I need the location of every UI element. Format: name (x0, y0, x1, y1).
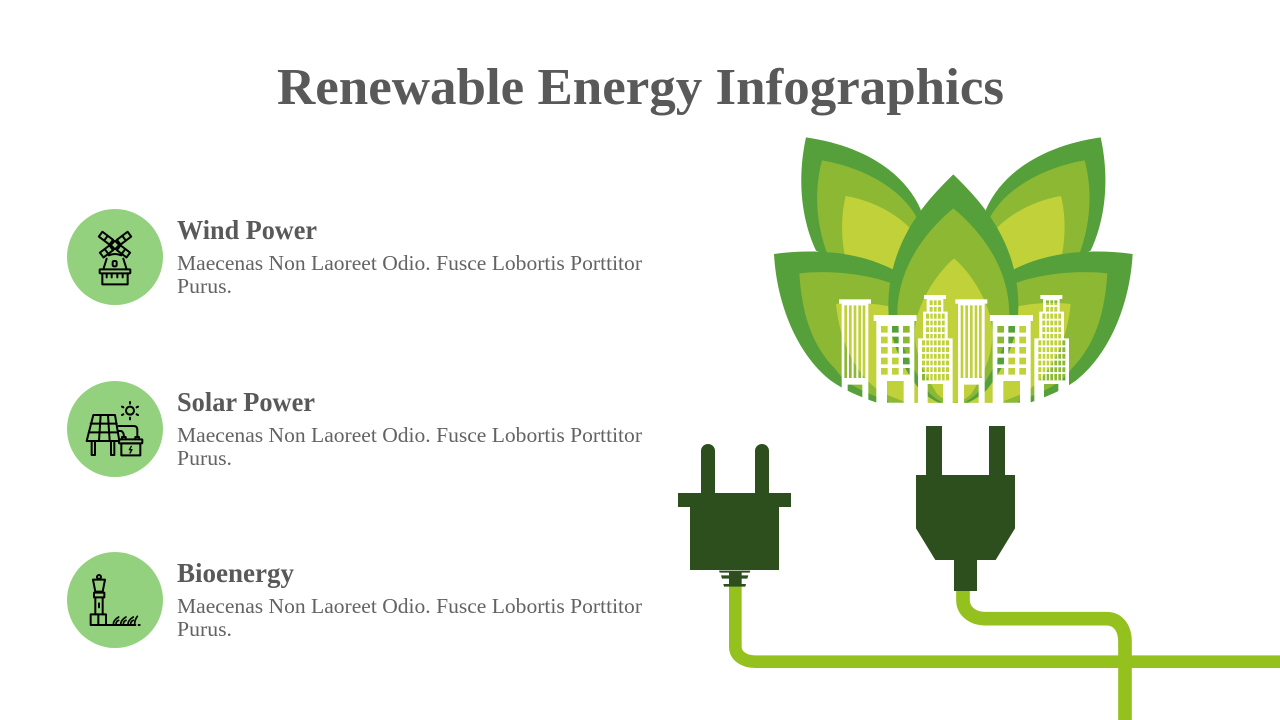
text: wind power description: Maecenas Non Laoreet Odio. Fusce Lobortis Porttitor (177, 251, 642, 275)
building 5 (990, 315, 1033, 403)
heading: wind power: Wind Power (177, 215, 317, 245)
centre leaf (888, 174, 1018, 408)
heading: solar power: Solar Power (177, 387, 315, 417)
front left leaf (774, 252, 960, 407)
building 3 (918, 295, 953, 403)
city buildings (839, 295, 1069, 403)
illustration: plugs and cables (678, 426, 1280, 720)
building 2 (874, 315, 917, 403)
icon circle: solar power (67, 381, 163, 477)
text: solar power description: Maecenas Non Laoreet Odio. Fusce Lobortis Porttitor (177, 423, 642, 447)
item: wind power (67, 209, 642, 305)
heading: bioenergy: Bioenergy (177, 558, 294, 588)
icon circle: wind power (67, 209, 163, 305)
leaves (774, 137, 1133, 408)
illustration: green leaf city (774, 137, 1133, 408)
building 1 (839, 299, 871, 403)
front right leaf (947, 252, 1133, 407)
text: bioenergy description: Maecenas Non Laoreet Odio. Fusce Lobortis Porttitor (177, 594, 642, 618)
building 4 (955, 299, 987, 403)
back left leaf (801, 137, 921, 270)
title: Renewable Energy Infographics (277, 59, 1004, 116)
plug: left (678, 444, 791, 587)
item: solar power (67, 381, 642, 477)
cable: right plug (963, 590, 1125, 720)
icon circle: bioenergy (67, 552, 163, 648)
back right leaf (986, 137, 1106, 270)
building 6 (1034, 295, 1069, 403)
text: bioenergy description: Purus. (177, 617, 232, 641)
text: solar power description: Purus. (177, 446, 232, 470)
cable: left plug (735, 585, 1280, 662)
plug: right (916, 426, 1015, 591)
item: bioenergy (67, 552, 642, 648)
text: wind power description: Purus. (177, 274, 232, 298)
